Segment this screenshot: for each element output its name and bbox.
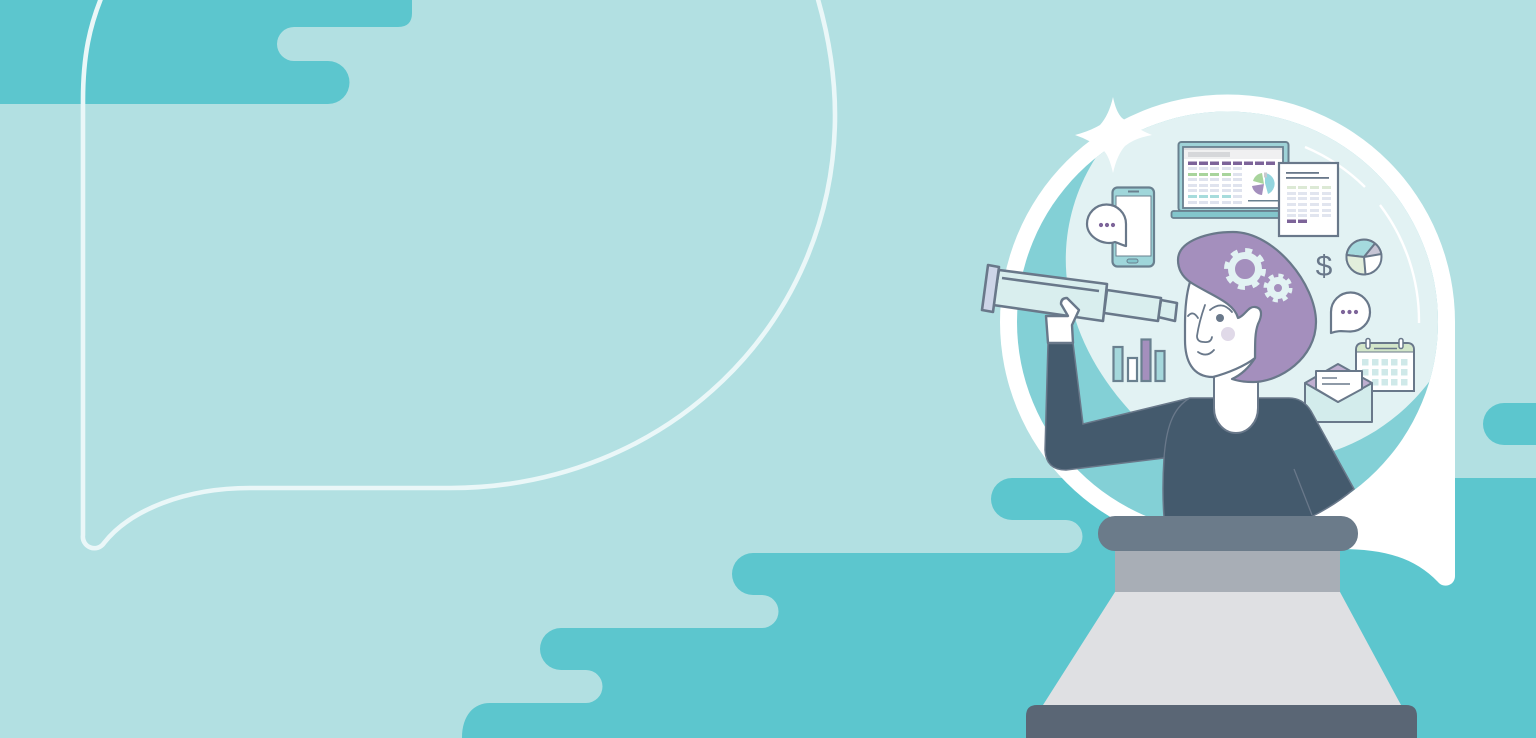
globe teal crescent xyxy=(1017,112,1438,532)
document xyxy=(1279,163,1338,236)
pedestal base xyxy=(1026,705,1417,738)
laptop table xyxy=(1184,148,1282,204)
gear: small xyxy=(1266,276,1290,300)
person xyxy=(1045,232,1354,517)
person eye xyxy=(1216,314,1224,322)
gear: large xyxy=(1226,250,1264,288)
person body xyxy=(1045,343,1354,517)
hand xyxy=(1046,298,1079,343)
person facial lines xyxy=(1188,305,1232,355)
icon: pie chart xyxy=(1346,240,1382,274)
globe bubble xyxy=(1000,90,1500,586)
bar chart xyxy=(1114,340,1164,381)
laptop pie chart xyxy=(1252,172,1275,195)
pedestal cap xyxy=(1098,516,1358,551)
pedestal xyxy=(1026,516,1417,738)
telescope xyxy=(982,265,1177,321)
globe highlight arcs xyxy=(1305,147,1419,323)
calendar xyxy=(1356,338,1414,391)
envelope xyxy=(1305,364,1372,422)
star xyxy=(1075,97,1152,173)
pedestal taper xyxy=(1043,592,1401,705)
speech bubble outline xyxy=(83,0,835,548)
cloud: top left xyxy=(0,0,412,104)
cloud: bottom band xyxy=(462,478,1536,738)
person hair xyxy=(1178,232,1316,382)
pedestal neck xyxy=(1115,551,1340,592)
cloud: right small xyxy=(1483,403,1536,445)
phone xyxy=(1112,188,1154,266)
globe light disc xyxy=(1066,112,1438,451)
speech bubble: right xyxy=(1331,293,1370,333)
person face xyxy=(1185,282,1261,377)
speech bubble: left xyxy=(1087,204,1126,246)
person neck xyxy=(1214,355,1258,433)
icon: dollar sign: $ xyxy=(1316,250,1333,283)
sleeve lines xyxy=(1164,398,1312,515)
person cheek xyxy=(1221,327,1235,341)
laptop xyxy=(1172,142,1288,218)
